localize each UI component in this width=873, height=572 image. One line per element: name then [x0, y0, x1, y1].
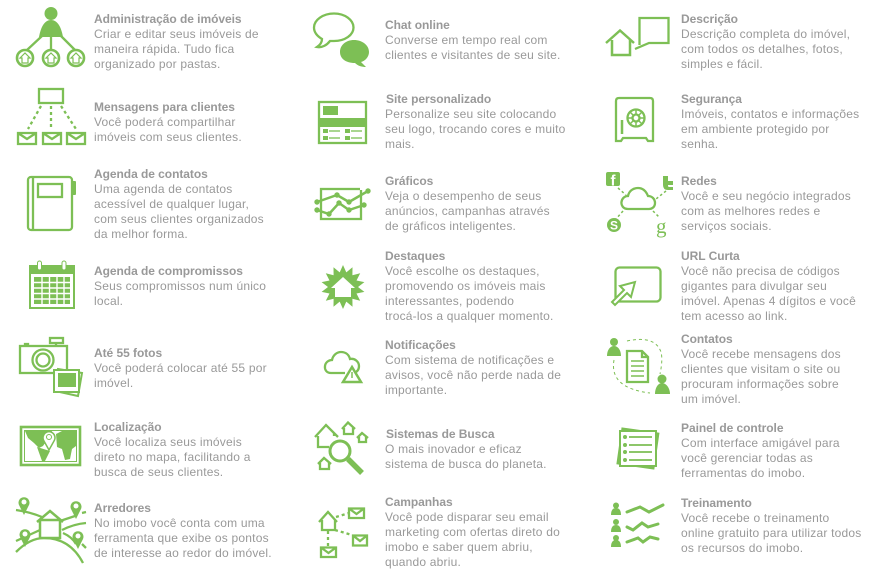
- panel: Treinamento: [610, 496, 865, 556]
- text: Sistemas de Busca: sistema de busca do planeta.: [385, 457, 547, 471]
- text: Chat online: Chat online: [385, 18, 450, 32]
- text: Segurança: em ambiente protegido por: [681, 122, 829, 136]
- panel: Segurança: [614, 92, 864, 152]
- icon: people with progress lines: [610, 500, 676, 550]
- text: Treinamento: online gratuito para utilizar todos: [681, 526, 861, 540]
- text: Até 55 fotos: [94, 346, 267, 390]
- panel: Painel de controle: [614, 421, 859, 481]
- panel: Notificações: [324, 338, 561, 397]
- text: Redes: Você e seu negócio integrados: [681, 189, 851, 203]
- text: Chat online: clientes e visitantes de seu site.: [385, 48, 561, 62]
- panel: Chat online: [312, 12, 561, 67]
- text: Até 55 fotos: imóvel.: [94, 376, 133, 390]
- text: Notificações: Com sistema de notificações e: [385, 353, 554, 367]
- panel: URL Curta: [610, 249, 860, 324]
- text: Arredores: Arredores: [94, 501, 151, 515]
- text: Painel de controle: Com interface amigável para: [681, 436, 840, 450]
- icon: stacked list sheets: [614, 425, 662, 471]
- text: Localização: busca de seus clientes.: [94, 465, 223, 479]
- text: Notificações: avisos, você não perde nada de: [385, 368, 561, 382]
- text: Até 55 fotos: Você poderá colocar até 55 por: [94, 361, 267, 375]
- panel: Gráficos: [314, 174, 550, 233]
- text: Arredores: No imobo você conta com uma: [94, 516, 265, 530]
- icon: cloud with social networks: S: [610, 218, 618, 232]
- text: Contatos: clientes que visitam o site ou: [681, 362, 840, 376]
- text: Administração de imóveis: Criar e editar seus imóveis de: [94, 27, 259, 41]
- text: Contatos: procuram informações sobre: [681, 377, 839, 391]
- text: Campanhas: Você pode disparar seu email: [385, 510, 549, 524]
- text: Notificações: [385, 338, 561, 397]
- text: Mensagens para clientes: Você poderá compartilhar: [94, 115, 236, 129]
- text: Chat online: [385, 18, 561, 62]
- text: Gráficos: anúncios, campanhas através: [385, 204, 550, 218]
- text: Administração de imóveis: [94, 12, 259, 71]
- text: Agenda de contatos: com seus clientes organizados: [94, 212, 264, 226]
- icon: cloud with social networks: f: [610, 172, 616, 190]
- text: URL Curta: [681, 249, 856, 324]
- text: Mensagens para clientes: Mensagens para clientes: [94, 100, 235, 114]
- text: Notificações: Notificações: [385, 338, 456, 352]
- text: Notificações: importante.: [385, 383, 447, 397]
- text: Agenda de compromissos: Agenda de compromissos: [94, 264, 243, 278]
- icon: camera and photos: [18, 336, 84, 398]
- text: Redes: Redes: [681, 174, 717, 188]
- text: Localização: direto no mapa, facilitando a: [94, 450, 251, 464]
- text: Destaques: Destaques: [385, 249, 445, 263]
- text: Campanhas: imobo e saber quem abriu,: [385, 540, 533, 554]
- icon: house with roads and pins: [15, 497, 87, 564]
- icon: house and envelopes: [316, 506, 376, 560]
- text: Agenda de compromissos: Seus compromissos num único: [94, 279, 266, 293]
- text: Agenda de contatos: Uma agenda de contatos: [94, 182, 232, 196]
- text: Site personalizado: Personalize seu site colocando: [385, 107, 556, 121]
- text: Mensagens para clientes: [94, 100, 242, 144]
- text: Agenda de contatos: Agenda de contatos: [94, 167, 208, 181]
- text: Agenda de contatos: da melhor forma.: [94, 227, 188, 241]
- text: Destaques: interessantes, podendo: [385, 294, 514, 308]
- text: Até 55 fotos: Até 55 fotos: [94, 346, 162, 360]
- text: Contatos: Contatos: [681, 332, 733, 346]
- text: Treinamento: os recursos do imobo.: [681, 541, 803, 555]
- text: Contatos: Você recebe mensagens dos: [681, 347, 841, 361]
- icon: document with two people: [605, 338, 673, 396]
- icon: box with dotted lines to envelopes: [16, 88, 86, 146]
- text: Gráficos: Gráficos: [385, 174, 433, 188]
- panel: Agenda de compromissos: [29, 260, 266, 309]
- text: Painel de controle: [681, 421, 840, 481]
- panel: Contatos: [605, 332, 860, 407]
- text: URL Curta: tem acesso ao link.: [681, 309, 788, 323]
- text: Segurança: Imóveis, contatos e informações: [681, 107, 859, 121]
- text: Painel de controle: ferramentas do imobo.: [681, 466, 805, 480]
- text: Redes: [681, 174, 851, 234]
- text: URL Curta: Você não precisa de códigos: [681, 264, 840, 278]
- icon: notebook: [26, 176, 76, 232]
- icon: safe: [614, 96, 656, 146]
- icon: person with house nodes: [16, 7, 86, 68]
- text: Destaques: [385, 249, 554, 323]
- text: Site personalizado: seu logo, trocando cores e muito: [385, 122, 566, 136]
- text: Gráficos: Veja o desempenho de seus: [385, 189, 541, 203]
- text: Arredores: [94, 501, 272, 560]
- text: Sistemas de Busca: [385, 427, 547, 471]
- panel: Localização: [20, 420, 251, 479]
- panel: Sistemas de Busca: [314, 420, 547, 475]
- text: Campanhas: Campanhas: [385, 495, 453, 509]
- icon: star badge with house: [322, 265, 364, 309]
- text: Localização: Localização: [94, 420, 161, 434]
- text: Segurança: Segurança: [681, 92, 742, 106]
- text: Descrição: simples e fácil.: [681, 57, 763, 71]
- text: Agenda de compromissos: [94, 264, 266, 308]
- text: Site personalizado: [385, 92, 566, 151]
- text: Destaques: trocá-los a qualquer momento.: [385, 309, 554, 323]
- text: Administração de imóveis: maneira rápida. Tudo fica: [94, 42, 234, 56]
- panel: Campanhas: [318, 495, 560, 569]
- text: Site personalizado: mais.: [385, 137, 415, 151]
- text: Contatos: [681, 332, 841, 407]
- text: Segurança: senha.: [681, 137, 718, 151]
- text: URL Curta: imóvel. Apenas 4 dígitos e você: [681, 294, 856, 308]
- icon: cloud with social networks: g: [656, 214, 667, 238]
- text: Agenda de contatos: acessível de qualquer lugar,: [94, 197, 249, 211]
- text: Destaques: Você escolhe os destaques,: [385, 264, 540, 278]
- icon: screen with cursor arrow: [610, 265, 664, 307]
- panel: Site personalizado: [318, 92, 566, 151]
- text: Descrição: Descrição: [681, 12, 738, 26]
- text: URL Curta: gigantes para divulgar seu: [681, 279, 827, 293]
- panel: Administração de imóveis: [16, 7, 259, 71]
- panel: Redes: [604, 170, 854, 236]
- text: Sistemas de Busca: O mais inovador e eficaz: [385, 442, 522, 456]
- text: Contatos: um imóvel.: [681, 392, 741, 406]
- text: Destaques: promovendo os imóveis mais: [385, 279, 546, 293]
- icon: houses and magnifier: [314, 420, 369, 475]
- text: Descrição: [681, 12, 850, 72]
- text: Localização: Você localiza seus imóveis: [94, 435, 242, 449]
- text: Redes: com as melhores redes e: [681, 204, 820, 218]
- text: Chat online: Converse em tempo real com: [385, 33, 548, 47]
- text: Campanhas: quando abriu.: [385, 555, 461, 569]
- icon: world map with pin: [20, 426, 82, 466]
- text: Arredores: de interesse ao redor do imóvel.: [94, 546, 272, 560]
- text: URL Curta: URL Curta: [681, 249, 740, 263]
- text: Segurança: [681, 92, 859, 152]
- text: Site personalizado: Site personalizado: [386, 92, 491, 106]
- text: Treinamento: Treinamento: [681, 496, 752, 510]
- panel: Mensagens para clientes: [16, 88, 242, 146]
- icon: speech bubbles: [312, 12, 369, 67]
- text: Agenda de compromissos: local.: [94, 294, 123, 308]
- icon: line chart: [314, 188, 371, 220]
- text: Localização: [94, 420, 251, 479]
- text: Redes: serviços sociais.: [681, 219, 772, 233]
- text: Treinamento: Você recebe o treinamento: [681, 511, 829, 525]
- text: Agenda de contatos: [94, 167, 264, 241]
- text: Arredores: ferramenta que exibe os pontos: [94, 531, 269, 545]
- text: Mensagens para clientes: imóveis com seus clientes.: [94, 130, 242, 144]
- panel: Agenda de contatos: [26, 167, 264, 241]
- text: Sistemas de Busca: Sistemas de Busca: [386, 427, 495, 441]
- text: Campanhas: [385, 495, 560, 570]
- text: Gráficos: de gráficos inteligentes.: [385, 219, 516, 233]
- text: Descrição: Descrição completa do imóvel,: [681, 27, 850, 41]
- text: Gráficos: [385, 174, 550, 233]
- icon: house with speech box: [604, 16, 672, 58]
- panel: Destaques: [322, 249, 554, 323]
- icon: cloud with social networks: [604, 170, 676, 236]
- icon: cloud with warning: [324, 350, 364, 384]
- text: Painel de controle: você gerenciar todas as: [681, 451, 813, 465]
- text: Descrição: com todos os detalhes, fotos,: [681, 42, 843, 56]
- text: Painel de controle: Painel de controle: [681, 421, 783, 435]
- text: Campanhas: marketing com ofertas direto do: [385, 525, 560, 539]
- text: Administração de imóveis: Administração de imóveis: [94, 12, 242, 26]
- icon: calendar: [29, 260, 75, 309]
- panel: Arredores: [15, 497, 272, 564]
- panel: Até 55 fotos: [18, 336, 267, 398]
- text: Treinamento: [681, 496, 861, 556]
- icon: website layout: [318, 100, 368, 144]
- text: Administração de imóveis: organizado por pastas.: [94, 57, 220, 71]
- panel: Descrição: [604, 12, 849, 72]
